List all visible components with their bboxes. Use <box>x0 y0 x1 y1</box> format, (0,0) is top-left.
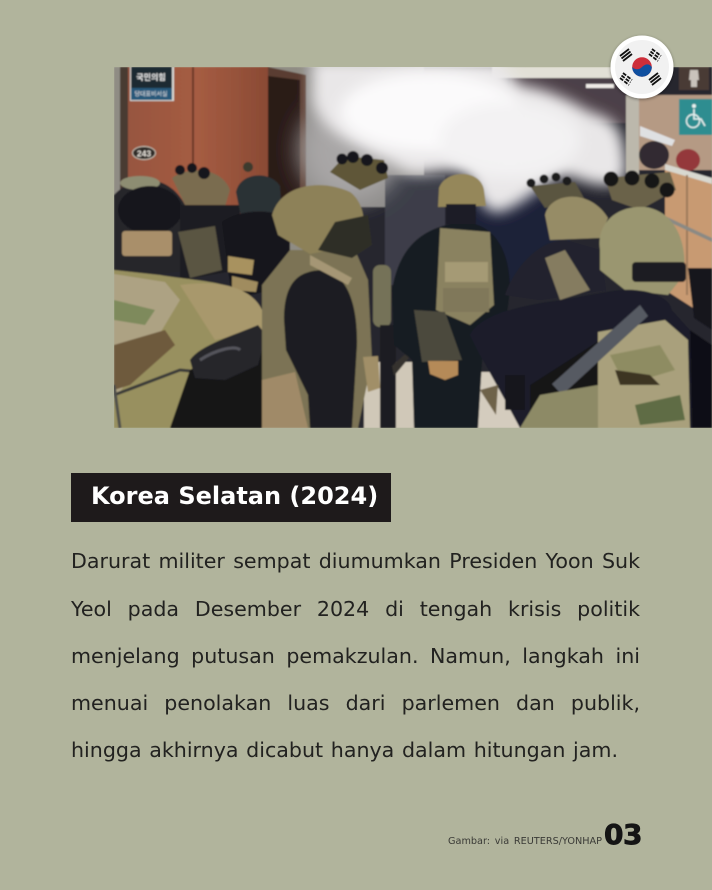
trigrams <box>620 49 661 85</box>
smoke cloud <box>300 60 675 212</box>
body text: menuai penolakan luas dari parlemen dan publik, <box>71 691 640 715</box>
room number plaque: 243 <box>137 148 151 158</box>
wood wall panels <box>665 164 712 320</box>
left soldiers group <box>114 162 290 300</box>
door <box>120 67 306 237</box>
page number: 03 <box>604 818 642 851</box>
body text: menjelang putusan pemakzulan. Namun, langkah ini <box>71 644 640 668</box>
door sign: 당대표비서실 <box>134 90 168 98</box>
body text <box>71 549 640 762</box>
corridor background <box>114 67 712 428</box>
floor <box>364 362 526 428</box>
ceiling and far corridor <box>492 67 712 171</box>
taegeuk <box>632 57 652 77</box>
foreground camouflage soldier <box>114 270 262 428</box>
right helmet with goggles <box>599 170 686 295</box>
goggles helmet near smoke <box>505 172 608 300</box>
room number plaque <box>132 146 156 160</box>
photo: soldiers in a smoke-filled corridor <box>114 67 712 428</box>
flag badge: South Korea <box>608 34 676 102</box>
foreground night-vision helmet <box>170 325 266 428</box>
soldier with back pack <box>392 174 510 428</box>
door sign <box>130 67 174 101</box>
wheelchair sign <box>679 99 712 135</box>
heading: Korea Selatan (2024) <box>71 473 391 522</box>
right soldier with camouflage back pack <box>470 268 712 428</box>
center soldier with dark jacket <box>262 185 414 428</box>
restroom sign <box>679 67 709 90</box>
image credit: Gambar: via REUTERS/YONHAP <box>448 836 602 847</box>
door sign: 국민의힘 <box>136 72 166 82</box>
body text: Yeol pada Desember 2024 di tengah krisis politik <box>71 597 640 621</box>
body text: hingga akhirnya dicabut hanya dalam hitungan jam. <box>71 738 618 762</box>
helmet with night-vision goggles centre <box>330 151 388 190</box>
heading: Korea Selatan (2024): Korea Selatan (2024) <box>91 482 378 510</box>
body text: Darurat militer sempat diumumkan Presiden Yoon Suk <box>71 549 640 573</box>
